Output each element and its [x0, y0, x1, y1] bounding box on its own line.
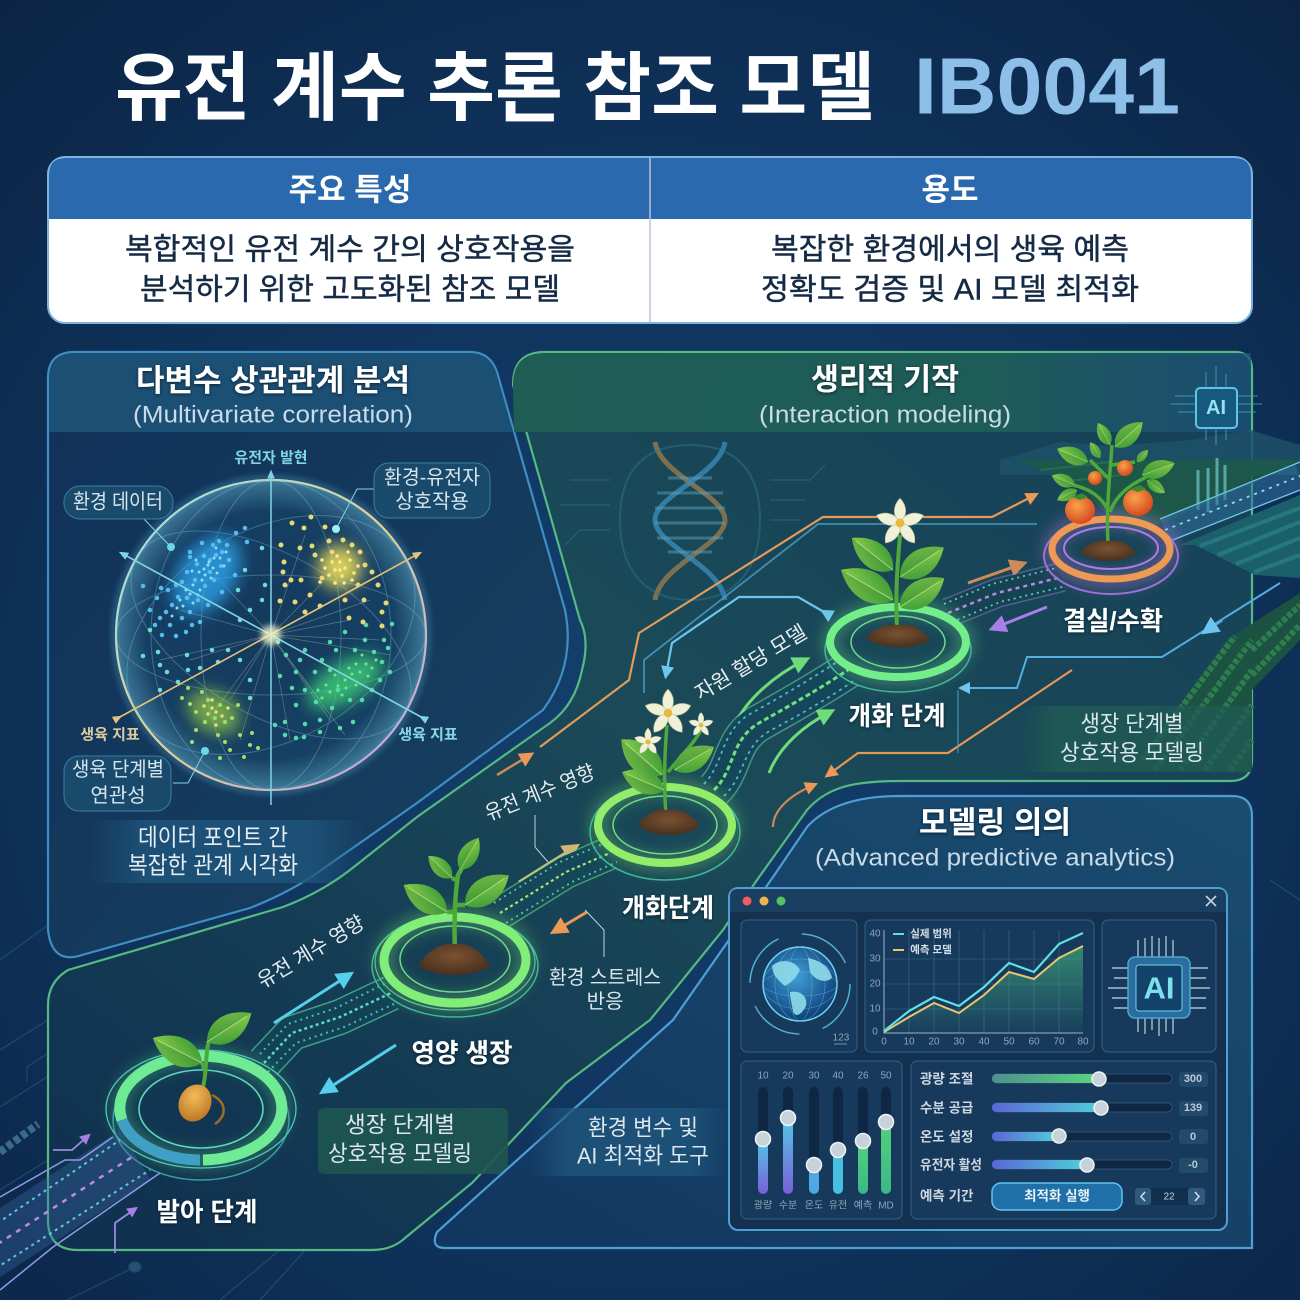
line chart card: 70	[1053, 1036, 1065, 1048]
data hatch marks	[0, 1124, 38, 1152]
callout: growth stage plasticity: 연관성	[90, 784, 146, 807]
axis label: growth index left: 생육 지표	[80, 726, 140, 744]
callout: stage interaction modeling, upper: 생장 단계별	[1080, 712, 1184, 736]
vertical sliders card: MD	[878, 1200, 894, 1212]
orange stress arrow	[555, 912, 587, 931]
purple arrow to flower	[994, 607, 1047, 628]
AI chip card	[1102, 920, 1216, 1052]
label: flowering stage: 개화 단계	[848, 701, 946, 731]
inbound purple arrow lower	[115, 1209, 135, 1253]
subheading: (Advanced predictive analytics)	[815, 844, 1175, 872]
label: branching stage: 개화단계	[622, 893, 714, 923]
icon: DNA helix	[560, 442, 825, 600]
table text: usage: 정확도 검증 및 AI 모델 최적화	[761, 274, 1139, 306]
axis label: gene expression: 유전자 발현	[234, 450, 308, 466]
line chart card: 예측 모델	[910, 943, 952, 956]
icon: AI chip small	[1170, 366, 1262, 445]
line chart card	[865, 920, 1094, 1052]
summary table	[48, 157, 1252, 323]
line chart card: 50	[1003, 1036, 1015, 1048]
sphere axes	[270, 474, 272, 805]
callout: growth stage plasticity	[64, 747, 209, 811]
horizontal sliders card: 300	[1184, 1073, 1202, 1085]
optimize button	[992, 1183, 1122, 1210]
flow paths	[274, 495, 1280, 1091]
optimize button: 최적화 실행	[1024, 1188, 1090, 1204]
vertical sliders card	[741, 1061, 902, 1219]
horizontal sliders card: 139	[1184, 1102, 1202, 1114]
horizontal sliders card: 유전자 활성	[920, 1158, 982, 1172]
sphere scatter chart	[84, 467, 458, 805]
table text: key properties	[125, 234, 575, 306]
title	[115, 42, 1180, 130]
period stepper: 22	[1163, 1192, 1175, 1202]
callout: stage interaction modeling, upper	[1020, 706, 1251, 772]
cyan arrows	[274, 975, 349, 1023]
vertical sliders card: 광량	[754, 1200, 772, 1212]
callout: gene-environment interaction: 환경-유전자	[384, 466, 480, 489]
horizontal sliders card: 0	[1190, 1131, 1196, 1143]
line chart card: 30	[869, 954, 881, 964]
genetic label leader	[535, 815, 548, 862]
vertical sliders card: 유전	[829, 1200, 847, 1212]
blue looping arrows	[666, 597, 824, 675]
header band	[513, 353, 1251, 432]
caption: environment and AI tool: AI 최적화 도구	[577, 1144, 709, 1168]
tan arrow	[519, 847, 575, 882]
plant: seed sprout	[147, 1002, 258, 1127]
table header: key properties: 주요 특성	[289, 172, 411, 208]
label: germination stage: 발아 단계	[156, 1197, 258, 1227]
title: 유전 계수 추론 참조 모델	[115, 46, 875, 130]
table text: key properties: 복합적인 유전 계수 간의 상호작용을	[125, 234, 575, 266]
vertical sliders card: 예측	[854, 1200, 872, 1212]
horizontal sliders card: 예측 기간	[920, 1188, 974, 1204]
panel: multivariate correlation	[48, 352, 568, 957]
ring: germination	[106, 1050, 296, 1180]
vertical sliders card: 50	[880, 1070, 892, 1082]
panel: modeling significance	[435, 796, 1252, 1248]
small orange arrow upper	[497, 755, 530, 775]
label: environmental stress response	[549, 966, 661, 1013]
callout: stage interaction modeling, lower: 생장 단계별	[345, 1112, 455, 1138]
orange return line	[828, 670, 1072, 775]
table header: usage: 용도	[921, 172, 979, 208]
title: IB0041	[914, 42, 1180, 130]
heading: 다변수 상관관계 분석	[136, 364, 410, 398]
plant: seedling	[397, 833, 516, 975]
table text: usage: 복잡한 환경에서의 생육 예측	[771, 234, 1129, 266]
table text: key properties: 분석하기 위한 고도화된 참조 모델	[140, 274, 560, 306]
label: environmental stress response: 환경 스트레스	[549, 966, 661, 989]
caption: environment and AI tool	[530, 1108, 730, 1176]
line chart card: 40	[978, 1036, 990, 1048]
caption strip: 데이터 포인트 간	[138, 824, 288, 852]
line chart card: 10	[869, 1004, 881, 1014]
label: genetic influence lower: 유전 계수 영향	[254, 911, 368, 993]
line chart card: 10	[903, 1036, 915, 1048]
subheading: (Interaction modeling)	[759, 402, 1011, 428]
label: vegetative growth: 영양 생장	[412, 1038, 513, 1068]
callout: environment data	[64, 486, 175, 551]
label: resource allocation model: 자원 할당 모델	[691, 621, 811, 705]
label: genetic influence upper: 유전 계수 영향	[482, 761, 598, 825]
inbound purple arrow upper	[53, 1136, 88, 1150]
panel: physiological mechanism and stage path	[48, 352, 1300, 1250]
axis label: growth index right: 생육 지표	[398, 726, 458, 744]
callout: growth stage plasticity: 생육 단계별	[72, 758, 164, 781]
callout: gene-environment interaction: 상호작용	[395, 490, 469, 513]
callout: stage interaction modeling, lower	[318, 1108, 508, 1174]
callout: gene-environment interaction	[332, 463, 490, 533]
icon: AI chip small: AI	[1206, 397, 1226, 419]
callout: environment data: 환경 데이터	[73, 490, 163, 514]
green curved arrows	[734, 660, 805, 727]
label: fruit and harvest: 결실/수확	[1063, 606, 1163, 636]
caption strip	[90, 820, 365, 883]
vertical sliders card: 40	[832, 1070, 844, 1082]
landscape background	[1000, 430, 1300, 772]
orange arrow to fruit	[968, 564, 1022, 583]
dashboard window	[729, 888, 1227, 1230]
ring: flowering	[825, 607, 971, 692]
subheading: (Multivariate correlation)	[133, 402, 413, 428]
plant: flowering	[834, 498, 951, 647]
pathway to upper right	[1160, 462, 1300, 541]
horizontal sliders card: 광량 조절	[920, 1072, 973, 1086]
line chart card: 30	[953, 1036, 965, 1048]
plant: flowering seedling	[612, 689, 720, 835]
caption strip: 복잡한 관계 시각화	[128, 852, 298, 880]
stress label leader	[585, 910, 604, 957]
horizontal sliders card	[911, 1061, 1216, 1219]
line chart card: 80	[1077, 1036, 1089, 1048]
vertical sliders card: 10	[757, 1070, 769, 1082]
globe card	[741, 920, 857, 1052]
callout: stage interaction modeling, upper: 상호작용 모델링	[1060, 740, 1204, 766]
line chart card: 실제 범위	[910, 927, 952, 940]
line chart card: 20	[928, 1036, 940, 1048]
vertical sliders card: 26	[857, 1070, 869, 1082]
vertical sliders card: 20	[782, 1070, 794, 1082]
caption: environment and AI tool: 환경 변수 및	[588, 1116, 698, 1140]
callout: stage interaction modeling, lower: 상호작용 모델링	[328, 1142, 472, 1166]
small orange curved arrow	[773, 785, 814, 827]
heading: 모델링 의의	[919, 806, 1071, 840]
globe card: 123	[833, 1032, 850, 1044]
bottom-left inbound pathway	[0, 1136, 160, 1290]
horizontal sliders card: 수분 공급	[920, 1100, 973, 1116]
plant: fruiting tomato	[1049, 415, 1178, 561]
horizontal sliders card: -0	[1188, 1159, 1198, 1171]
vertical sliders card: 수분	[779, 1200, 797, 1212]
background circuit lines	[0, 880, 1300, 1300]
ring: fruiting	[1044, 518, 1178, 594]
line chart card: 0	[872, 1026, 878, 1038]
table text: usage	[761, 234, 1139, 306]
blue line	[644, 524, 1037, 693]
label: environmental stress response: 반응	[587, 990, 623, 1013]
ring: vegetative growth	[372, 914, 538, 1017]
heading: 생리적 기작	[811, 363, 959, 397]
blue return line	[962, 583, 1280, 688]
line chart card: 0	[881, 1036, 887, 1048]
growth pathway bands	[260, 568, 1066, 1072]
period stepper	[1135, 1188, 1205, 1205]
ring: branching stage	[590, 784, 740, 880]
vertical sliders card: 30	[808, 1070, 820, 1082]
line chart card: 40	[869, 928, 881, 940]
AI chip card: AI	[1144, 970, 1174, 1006]
line chart card: 20	[869, 978, 881, 990]
orange resource line	[540, 495, 1035, 747]
line chart card: 60	[1028, 1036, 1040, 1048]
horizontal sliders card: 온도 설정	[920, 1130, 973, 1144]
vertical sliders card: 온도	[805, 1200, 823, 1212]
